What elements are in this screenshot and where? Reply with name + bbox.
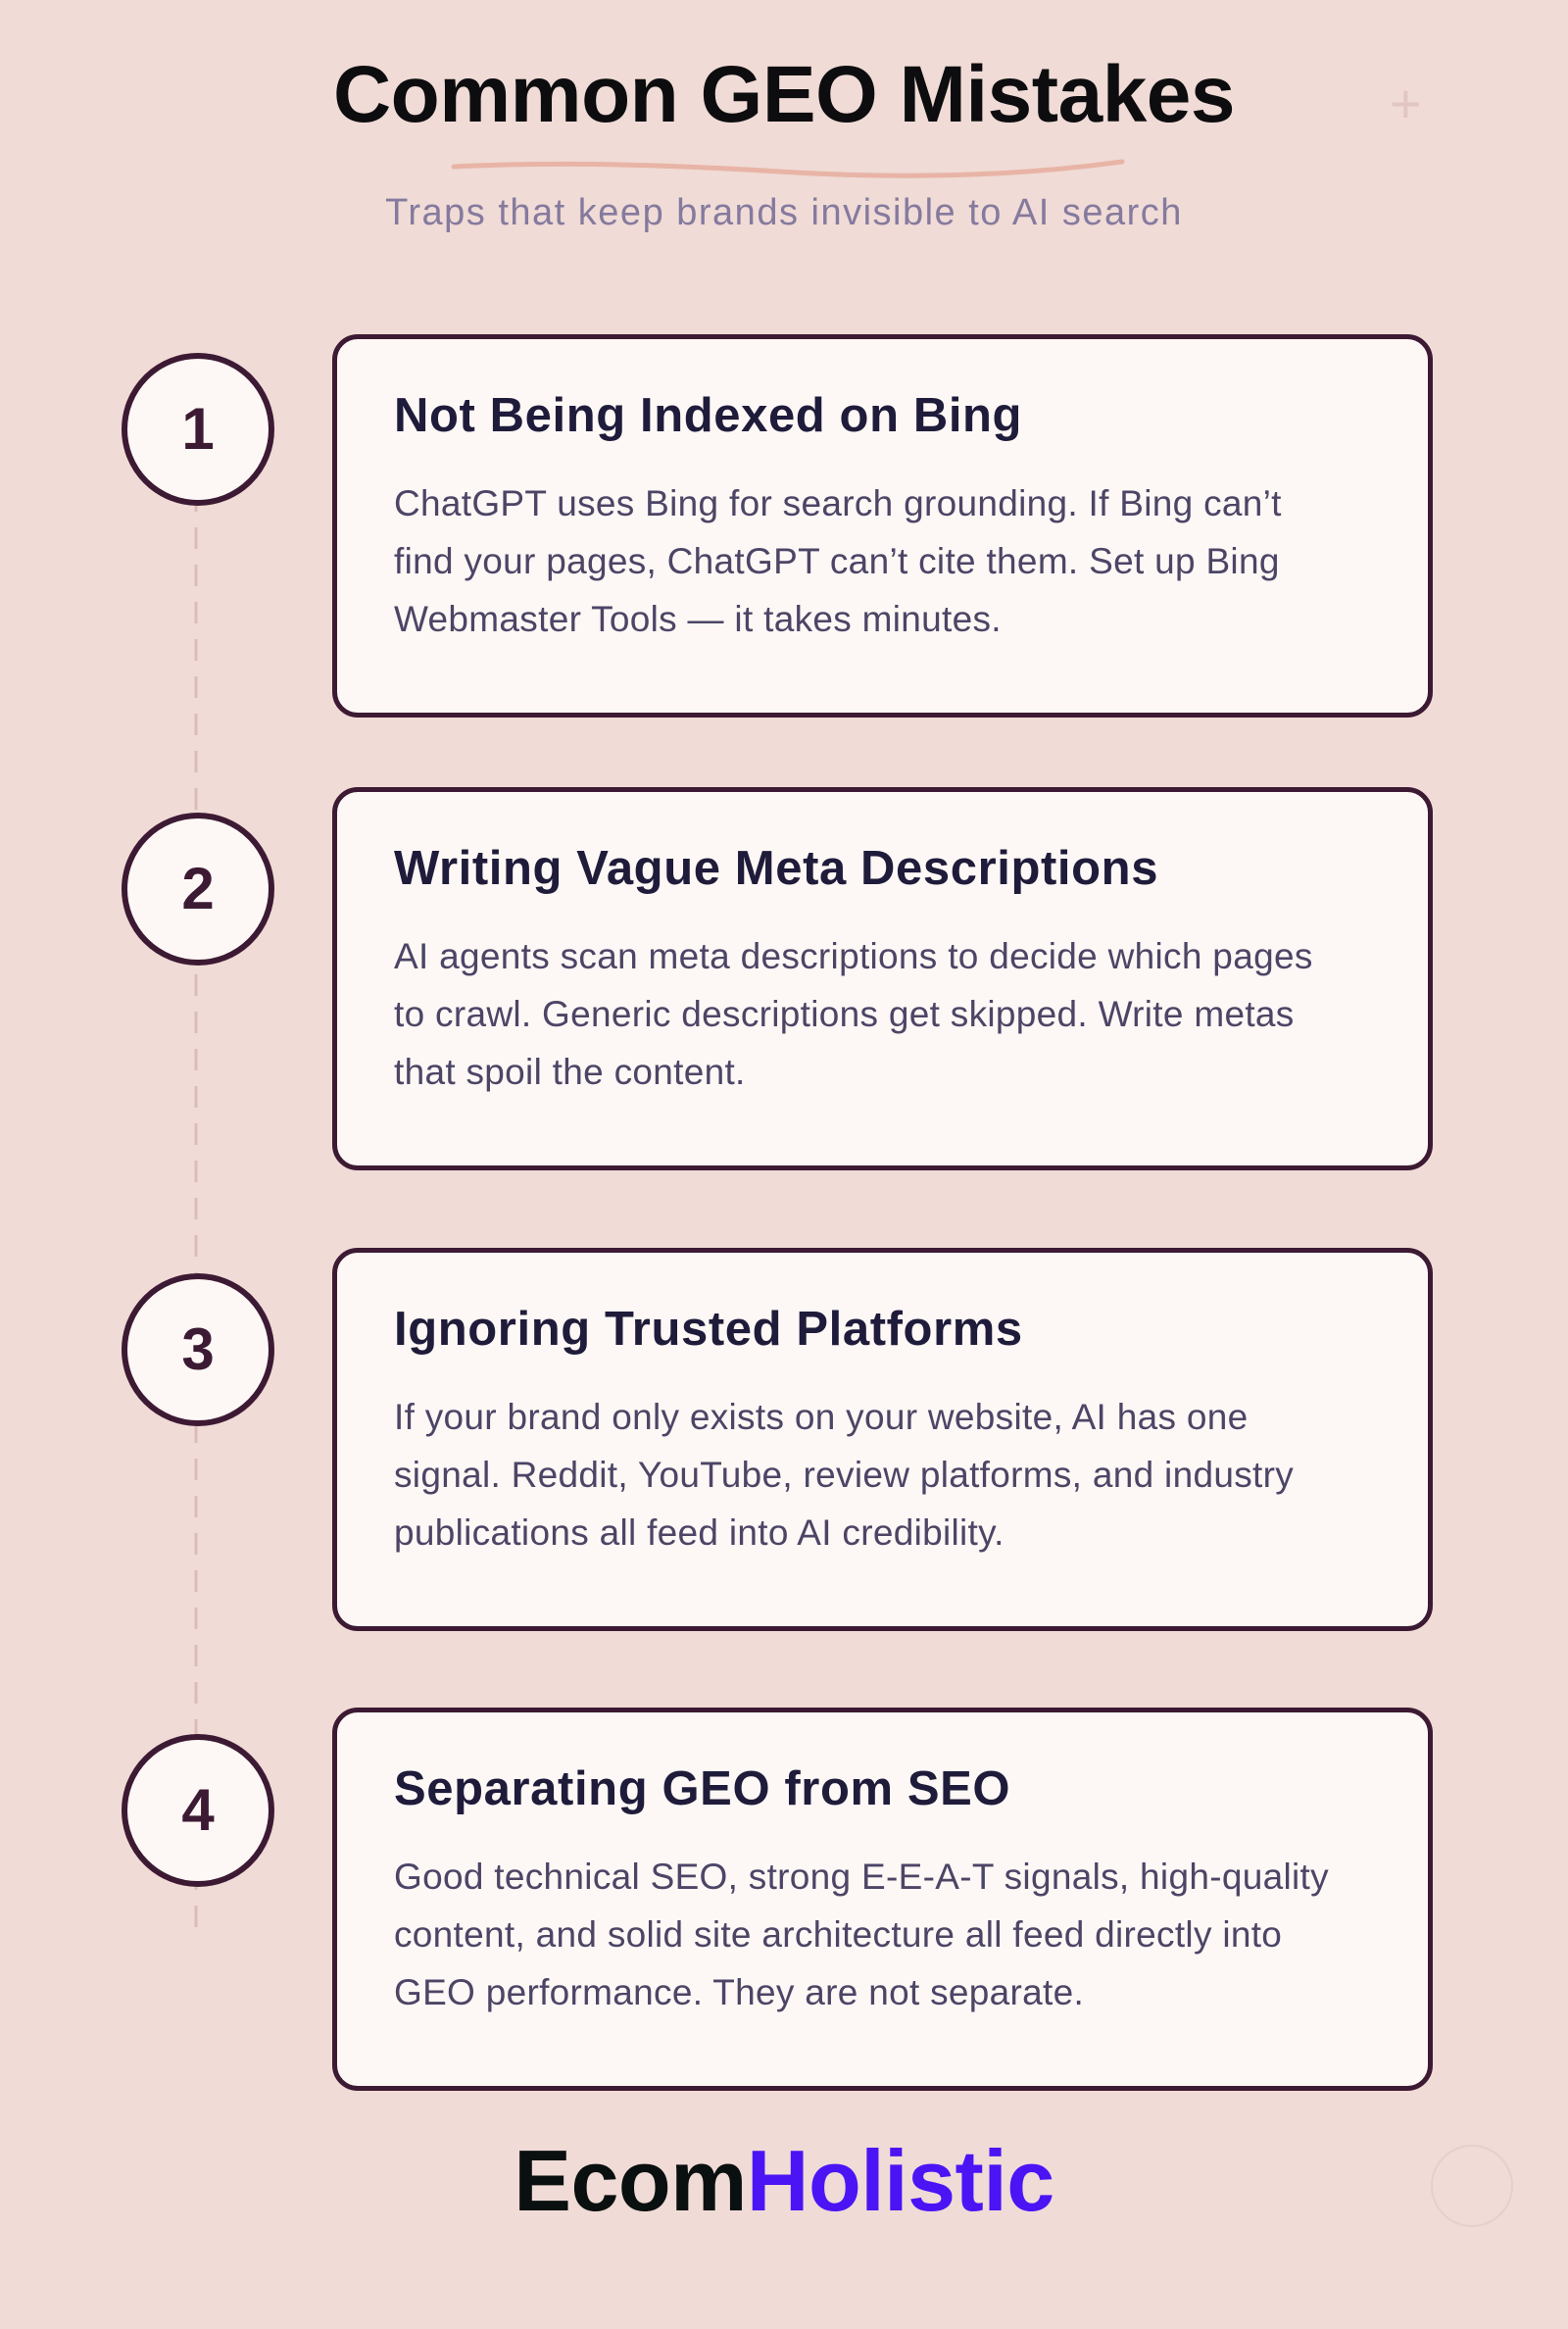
text 3: signal. Reddit, YouTube, review platforms, and industry bbox=[394, 1455, 1294, 1495]
text 3 bbox=[394, 1397, 1294, 1553]
dashed timeline bbox=[194, 506, 198, 1927]
logo: EcomHolistic bbox=[514, 2132, 1054, 2229]
icon: plus decoration: + bbox=[1390, 73, 1422, 134]
text 2: to crawl. Generic descriptions get skipped. Write metas bbox=[394, 994, 1295, 1034]
panel: mistake 1 bbox=[332, 334, 1433, 718]
step 4 number: 4 bbox=[181, 1777, 215, 1843]
step 1 number: 1 bbox=[181, 396, 215, 462]
text 2: AI agents scan meta descriptions to decide which pages bbox=[394, 936, 1313, 976]
text 3: publications all feed into AI credibility. bbox=[394, 1512, 1004, 1553]
text 1 bbox=[394, 483, 1282, 639]
text 1: Webmaster Tools — it takes minutes. bbox=[394, 599, 1002, 639]
text 4: content, and solid site architecture all feed directly into bbox=[394, 1914, 1282, 1955]
panel: mistake 4 bbox=[332, 1708, 1433, 2091]
title underline bbox=[451, 159, 1125, 178]
step 4 number bbox=[122, 1734, 274, 1887]
step 2 number: 2 bbox=[181, 856, 215, 921]
step 2 number bbox=[122, 813, 274, 966]
subtitle: Traps that keep brands invisible to AI search bbox=[385, 192, 1183, 233]
icon: faint circle bbox=[1431, 2145, 1513, 2227]
step 3 number bbox=[122, 1273, 274, 1426]
text 1: find your pages, ChatGPT can’t cite them. Set up Bing bbox=[394, 541, 1280, 581]
text 4: GEO performance. They are not separate. bbox=[394, 1972, 1084, 2012]
title: Common GEO Mistakes bbox=[333, 50, 1235, 139]
text 4 bbox=[394, 1857, 1329, 2012]
text 2: that spoil the content. bbox=[394, 1052, 746, 1092]
step 1 number bbox=[122, 353, 274, 506]
heading 4: Separating GEO from SEO bbox=[394, 1762, 1010, 1815]
panel: mistake 3 bbox=[332, 1248, 1433, 1631]
text 4: Good technical SEO, strong E-E-A-T signals, high-quality bbox=[394, 1857, 1329, 1897]
text 1: ChatGPT uses Bing for search grounding. If Bing can’t bbox=[394, 483, 1282, 523]
text 2 bbox=[394, 936, 1313, 1092]
heading 1: Not Being Indexed on Bing bbox=[394, 389, 1022, 442]
panel: mistake 2 bbox=[332, 787, 1433, 1170]
step 3 number: 3 bbox=[181, 1316, 215, 1382]
heading 3: Ignoring Trusted Platforms bbox=[394, 1303, 1023, 1356]
heading 2: Writing Vague Meta Descriptions bbox=[394, 842, 1158, 895]
text 3: If your brand only exists on your website, AI has one bbox=[394, 1397, 1249, 1437]
